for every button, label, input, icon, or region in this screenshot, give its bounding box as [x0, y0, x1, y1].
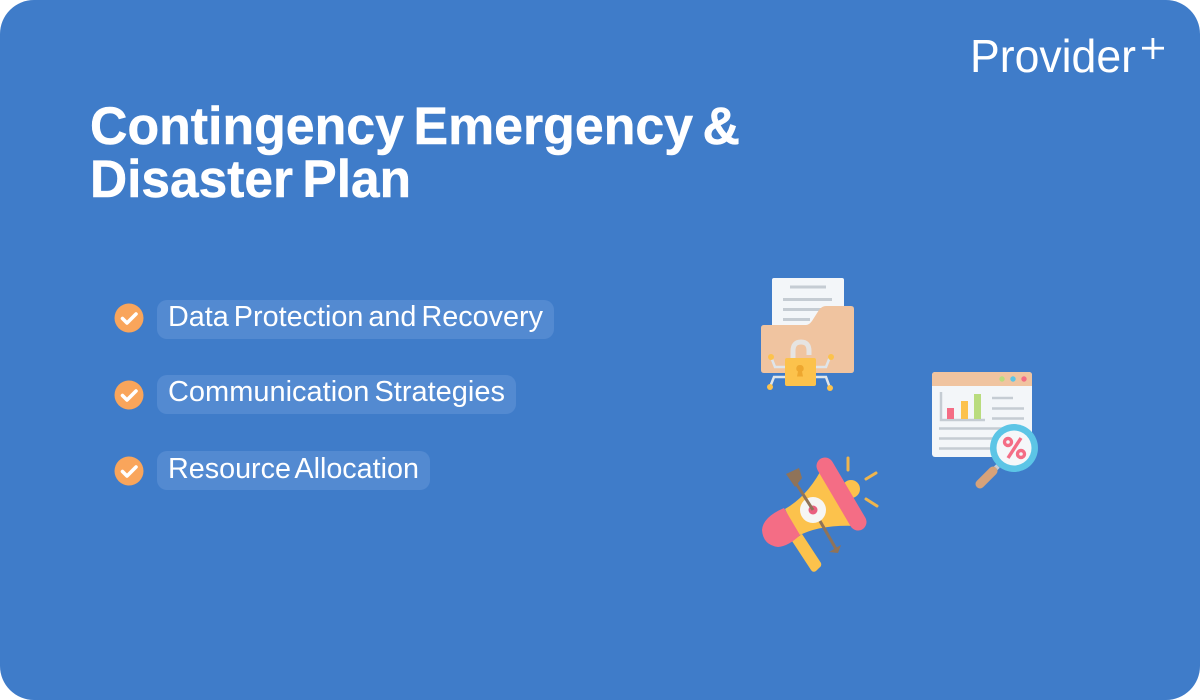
list item: Communication Strategies [114, 375, 516, 414]
logo: Provider+: Provider [970, 30, 1136, 82]
title: Disaster Plan [90, 150, 411, 209]
title: Contingency Emergency & [90, 97, 740, 156]
icon: megaphone with arrow [762, 458, 877, 572]
list item: Resource Allocation: Resource Allocation [168, 453, 419, 485]
list item: Data Protection and Recovery: Data Protection and Recovery [168, 301, 543, 333]
title [90, 97, 740, 209]
icon: analytics window with magnifier [932, 372, 1038, 484]
icon: folder with padlock [761, 278, 854, 391]
list item: Communication Strategies: Communication Strategies [168, 376, 505, 408]
list item: Resource Allocation [114, 451, 430, 490]
